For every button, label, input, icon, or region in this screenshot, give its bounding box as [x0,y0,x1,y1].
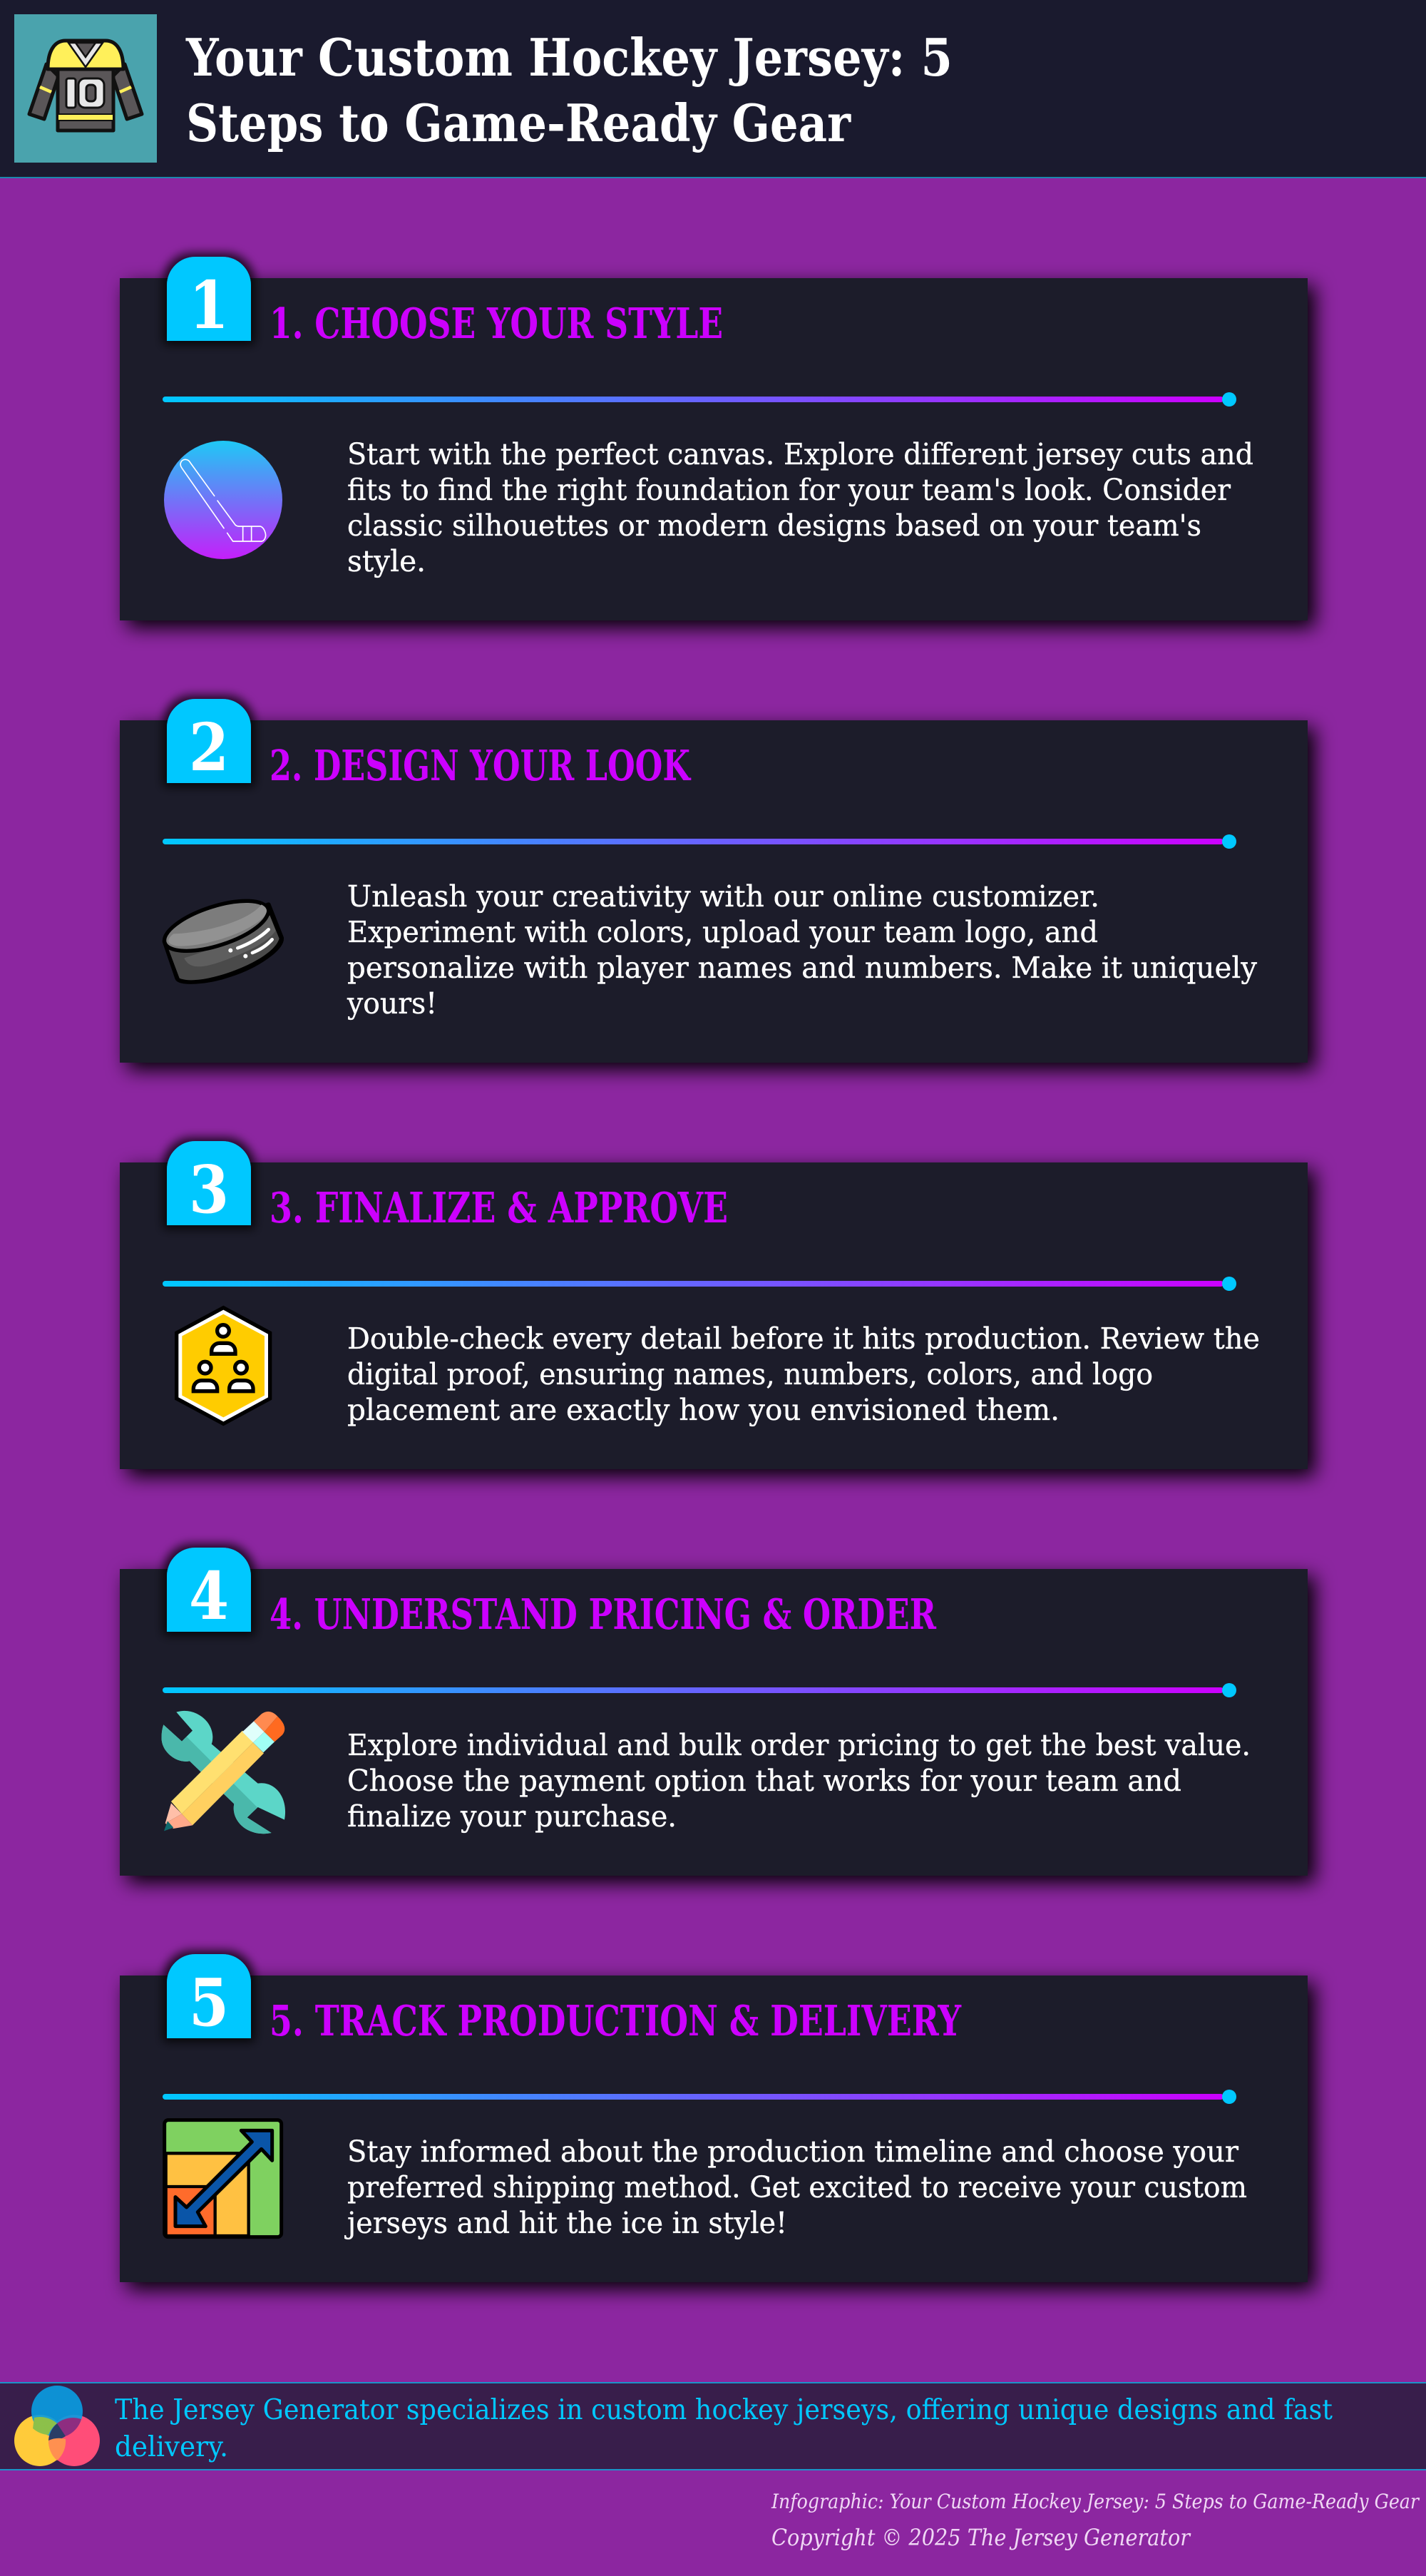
description: finalize your purchase. [347,1799,677,1834]
panel: step 2 [120,699,1308,1063]
icon: pencil and wrench [162,1711,285,1834]
number badge 1 [167,257,251,344]
heading: 4. UNDERSTAND PRICING & ORDER [270,1590,937,1639]
icon: overlapping circles logo [14,2386,100,2466]
description [347,437,1253,578]
title [185,27,953,153]
footer credits [771,2490,1420,2551]
description [347,1322,1260,1427]
icon: team hexagon [175,1306,272,1426]
description: Explore individual and bulk order pricing to get the best value. [347,1728,1251,1762]
panel: step 5 [120,1954,1308,2282]
gradient divider with dot [163,1277,1236,1291]
heading: 1. CHOOSE YOUR STYLE [270,299,723,348]
icon: growth chart [165,2120,282,2237]
description: style. [347,544,426,578]
company text [115,2394,1333,2463]
description: personalize with player names and numbers. Make it uniquely [347,951,1258,985]
description: Stay informed about the production timeline and choose your [347,2135,1238,2169]
gradient divider with dot [163,392,1236,407]
company text: delivery. [115,2431,228,2463]
number badge 3: 3 [189,1151,229,1228]
icon: hockey jersey [14,14,157,163]
panel: step 3 [120,1141,1308,1469]
title: Your Custom Hockey Jersey: 5 [185,27,953,88]
number badge 4: 4 [189,1558,229,1635]
description: placement are exactly how you envisioned them. [347,1393,1060,1427]
number badge 4 [167,1548,251,1635]
description: yours! [347,986,437,1021]
panel: step 4 [120,1548,1308,1876]
panel: step 1 [120,257,1308,620]
company band [0,2382,1426,2470]
description: Double-check every detail before it hits production. Review the [347,1322,1260,1356]
description: Unleash your creativity with our online customizer. [347,879,1099,914]
number badge 5 [167,1954,251,2041]
description: Experiment with colors, upload your team logo, and [347,915,1098,949]
description: preferred shipping method. Get excited to receive your custom [347,2170,1247,2204]
description: digital proof, ensuring names, numbers, colors, and logo [347,1357,1153,1391]
heading: 3. FINALIZE & APPROVE [270,1183,728,1232]
icon: hockey puck [159,891,282,982]
heading: 5. TRACK PRODUCTION & DELIVERY [270,1996,962,2045]
gradient divider with dot [163,1683,1236,1697]
number badge 2: 2 [189,709,229,786]
description: jerseys and hit the ice in style! [344,2206,787,2240]
description [347,879,1258,1021]
description: Choose the payment option that works for your team and [347,1764,1181,1798]
number badge 3 [167,1141,251,1228]
gradient divider with dot [163,2090,1236,2104]
number badge 1: 1 [189,267,229,344]
header [0,0,1426,178]
description: classic silhouettes or modern designs based on your team's [347,508,1201,543]
description [347,1728,1251,1834]
company text: The Jersey Generator specializes in custom hockey jerseys, offering unique designs and fast [115,2394,1333,2426]
description [344,2135,1247,2240]
title: Steps to Game-Ready Gear [186,93,851,153]
description: Start with the perfect canvas. Explore different jersey cuts and [347,437,1253,471]
number badge 2 [167,699,251,786]
number badge 5: 5 [189,1964,229,2041]
heading: 2. DESIGN YOUR LOOK [270,741,692,790]
gradient divider with dot [163,834,1236,849]
icon: hockey stick [164,441,282,559]
footer credits: Copyright © 2025 The Jersey Generator [771,2524,1191,2551]
description: fits to find the right foundation for your team's look. Consider [347,473,1231,507]
